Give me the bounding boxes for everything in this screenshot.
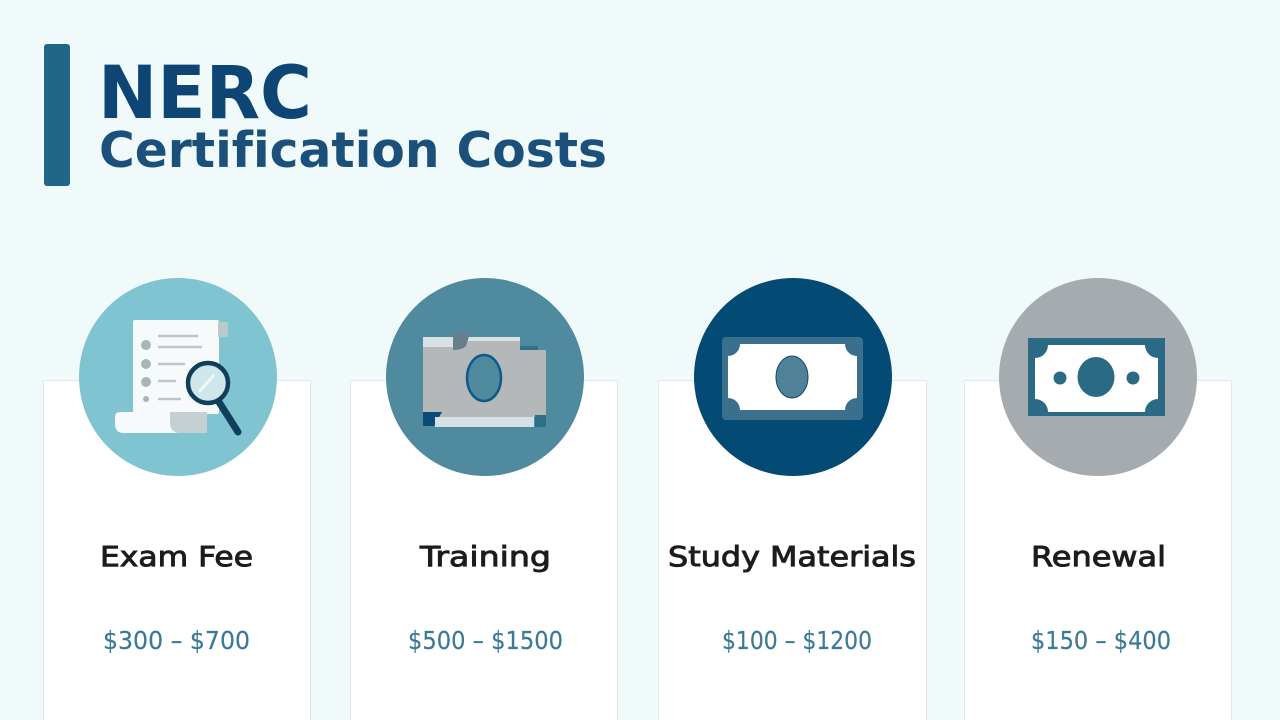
price: $300 – $700 [103, 626, 250, 655]
icon: banknote [694, 278, 892, 476]
card [964, 380, 1232, 720]
card [350, 380, 618, 720]
card [44, 380, 310, 720]
label: Training [419, 540, 551, 573]
panel: exam fee [44, 278, 310, 720]
price: $150 – $400 [1031, 626, 1171, 655]
label: Study Materials [668, 540, 916, 573]
price: $100 – $1200 [722, 626, 872, 655]
price: $500 – $1500 [408, 626, 563, 655]
icon: banknote with dots [999, 278, 1197, 476]
panel: renewal [964, 278, 1232, 720]
panel: study materials [658, 278, 926, 720]
card [658, 380, 926, 720]
title accent bar [44, 44, 70, 186]
label: Exam Fee [100, 540, 253, 573]
panel: training [350, 278, 618, 720]
subtitle: Certification Costs: Certification Costs [99, 122, 607, 179]
header [44, 44, 607, 186]
icon: document with magnifying glass [79, 278, 277, 476]
icon: folder [386, 278, 584, 476]
label: Renewal [1031, 540, 1166, 573]
title: NERC: NERC [98, 51, 312, 136]
